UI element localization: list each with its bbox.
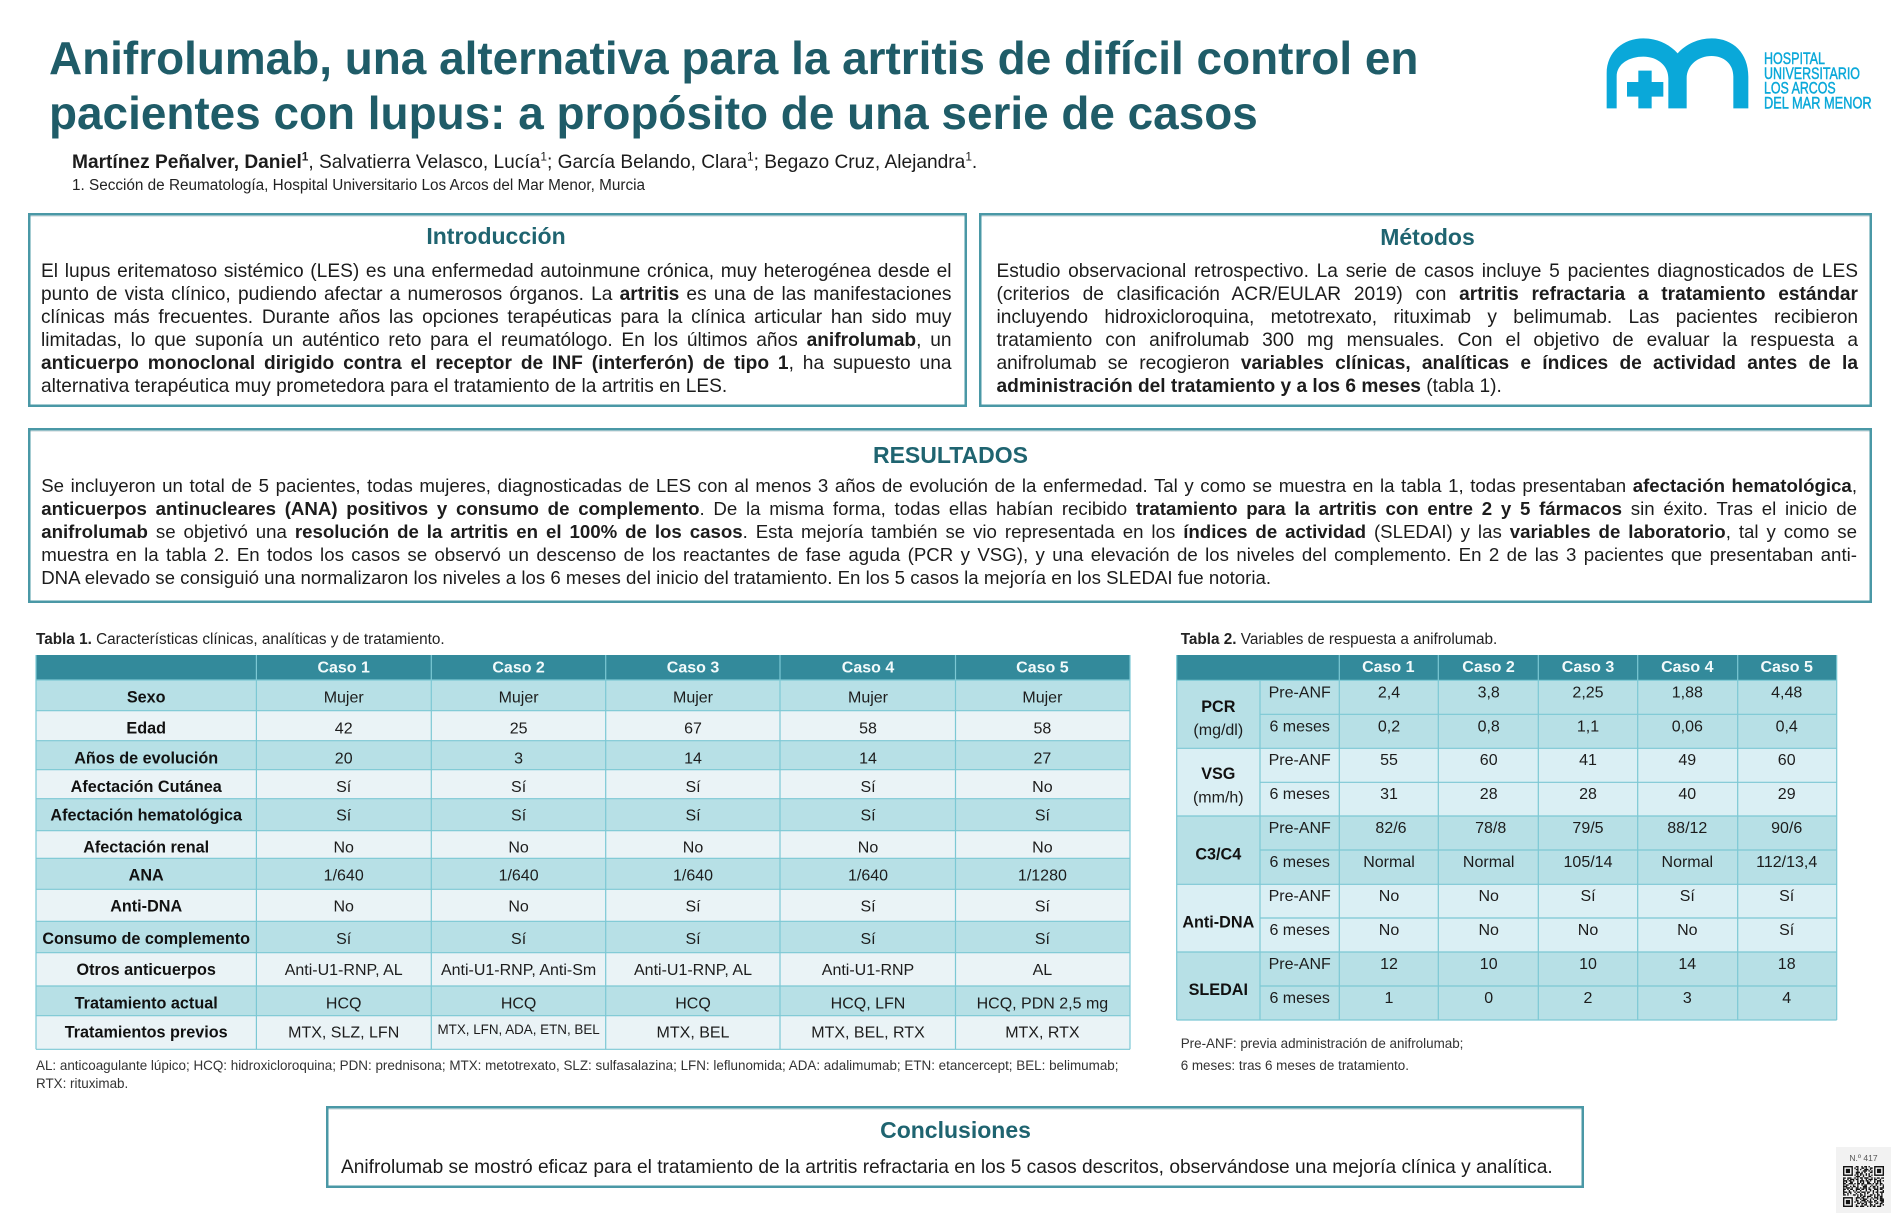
logo text: HOSPITAL [1764,49,1825,68]
row: años de evolución: 27 [1034,750,1051,767]
group: C3/C4: 90/6 [1771,820,1802,837]
group: Anti-DNA: No [1478,888,1499,905]
group: VSG: 60 [1778,752,1796,769]
text: introducción: punto de vista clínico, pudiendo afectar a numerosos órganos. La artritis es una de las manifestaciones [41,284,952,305]
row: ana: 1/640 [673,868,713,885]
group: Anti-DNA: Sí [1779,922,1795,939]
group: PCR: 0,8 [1478,718,1500,735]
group: SLEDAI: 1 [1385,990,1394,1007]
row: edad: 42 [335,720,353,737]
row: otros anticuerpos: Anti-U1-RNP, AL [634,962,752,979]
table 2 header: Caso 2 [1462,659,1515,676]
group: SLEDAI: 12 [1380,956,1398,973]
title: Anifrolumab, una alternativa para la artritis de difícil control en [49,32,1418,84]
group: SLEDAI: 14 [1678,956,1696,973]
group: PCR: 2,25 [1572,684,1604,701]
row: edad: Edad [126,719,166,737]
row: tratamiento actual: HCQ [501,995,536,1012]
row: consumo de complemento: Sí [1035,931,1051,948]
group: Anti-DNA [1182,888,1795,939]
panel: introducción [28,213,967,407]
row: afectación cutánea: Sí [685,779,701,796]
row: consumo de complemento: Sí [860,931,876,948]
row: consumo de complemento: Sí [511,931,527,948]
row: tratamiento actual: HCQ [326,995,361,1012]
row: afectación cutánea: Sí [511,779,527,796]
row: afectación hematológica: Sí [685,808,701,825]
row: sexo: Mujer [1022,689,1063,706]
table 2 [1176,655,1838,1021]
title [49,32,1418,139]
QR badge [1836,1147,1891,1213]
row: consumo de complemento: Sí [336,931,352,948]
caption: tabla 1: Tabla 1. Características clínicas, analíticas y de tratamiento. [36,631,445,648]
group: C3/C4: Normal [1662,854,1713,871]
row: ana: 1/1280 [1018,868,1067,885]
group: VSG: (mm/h) [1193,790,1244,806]
text: resultados: anifrolumab se objetivó una resolución de la artritis en el 100% de los casos. Esta mejoría también se vio representada en los índices de actividad (SLEDAI) y las variables de laboratorio, tal y como se [41,521,1857,542]
group: Anti-DNA: No [1578,922,1598,939]
icon: cross [1627,71,1663,108]
row: afectación cutánea: Sí [336,779,352,796]
table 2 header: Caso 4 [1661,659,1714,676]
row: consumo de complemento: Sí [685,931,701,948]
group: PCR [1193,684,1802,739]
row: edad: 58 [1034,720,1051,737]
panel: conclusiones [326,1106,1584,1188]
row: ana: 1/640 [499,868,539,885]
text: introducción: limitadas, lo que suponía un auténtico reto para el reumatólogo. En los últimos años anifrolumab, un [41,330,952,351]
group: Anti-DNA: No [1677,922,1698,939]
group: VSG: 55 [1380,752,1398,769]
row: otros anticuerpos: Anti-U1-RNP, AL [285,962,403,979]
row: afectación renal [83,839,1053,857]
group: Anti-DNA: Sí [1580,888,1596,905]
affiliation: 1. Sección de Reumatología, Hospital Universitario Los Arcos del Mar Menor, Murcia [72,177,645,194]
poster number: N.º 417 [1849,1153,1878,1163]
table 2 header: Caso 1 [1362,659,1415,676]
row: sexo: Mujer [848,689,889,706]
group: VSG: 31 [1380,786,1398,803]
group: C3/C4: Pre-ANF [1269,820,1331,837]
group: PCR: 0,4 [1776,718,1798,735]
group: C3/C4: 112/13,4 [1756,854,1817,871]
group: C3/C4: Normal [1463,854,1514,871]
row: tratamientos previos: MTX, LFN, ADA, ETN, BEL [437,1022,600,1037]
group: PCR: 1,1 [1577,718,1599,735]
footnote: tabla 1: AL: anticoagulante lúpico; HCQ: hidroxicloroquina; PDN: prednisona; MTX: metotrexato, SLZ: sulfasalazina; LFN: leflunomida; ADA: adalimumab; ETN: etancercept; BEL: belimumab; [36,1058,1118,1073]
row: ana [129,867,1067,885]
heading: introducción: Introducción [426,223,566,249]
group: PCR: 1,88 [1672,684,1703,701]
group: SLEDAI: 2 [1584,990,1593,1007]
row: edad [126,719,1051,737]
row: afectación hematológica: Sí [1035,808,1051,825]
text: resultados: anticuerpos antinucleares (ANA) positivos y consumo de complemento. De la misma forma, todas ellas habían recibido tratamiento para la artritis con entre 2 y 5 fármacos sin éxito. Tras el inicio de [41,498,1857,519]
text: introducción [41,261,952,397]
text: métodos: administración del tratamiento y a los 6 meses (tabla 1). [996,376,1502,397]
footnote: tabla 2 [1181,1036,1463,1073]
row: afectación renal: No [508,840,529,857]
logo: Hospital Universitario Los Arcos del Mar Menor [1606,38,1872,112]
row: anti-dna: Sí [685,899,701,916]
group: Anti-DNA: No [1379,888,1399,905]
group: Anti-DNA: No [1478,922,1499,939]
group: SLEDAI: 4 [1782,990,1791,1007]
row: afectación renal: Afectación renal [83,839,209,857]
row: ana: ANA [129,867,164,885]
group: VSG: 6 meses [1269,786,1330,803]
group: C3/C4 [1195,820,1817,871]
table 1 header: Caso 1 [317,659,370,676]
row: tratamiento actual: Tratamiento actual [75,994,218,1012]
group: C3/C4: 6 meses [1269,854,1330,871]
group: SLEDAI [1189,956,1796,1007]
row: otros anticuerpos: Anti-U1-RNP [822,962,914,979]
row: tratamientos previos: MTX, BEL [657,1025,730,1042]
row: tratamientos previos: MTX, BEL, RTX [811,1025,925,1042]
footnote: tabla 2: Pre-ANF: previa administración de anifrolumab; [1181,1036,1463,1051]
row: sexo: Mujer [499,689,539,706]
row: tratamientos previos [65,1022,1080,1042]
group: Anti-DNA: Sí [1779,888,1795,905]
row: afectación hematológica: Sí [860,808,876,825]
logo text: LOS ARCOS [1764,78,1836,97]
row: anti-dna: Anti-DNA [110,898,182,916]
row: otros anticuerpos: Anti-U1-RNP, Anti-Sm [441,962,596,979]
group: Anti-DNA: 6 meses [1269,922,1330,939]
row: afectación renal: No [1032,840,1053,857]
group: SLEDAI: SLEDAI [1189,981,1248,999]
row: afectación hematológica: Afectación hematológica [50,807,243,825]
table 1 header: Caso 2 [492,659,545,676]
group: Anti-DNA: Anti-DNA [1182,913,1255,931]
group: SLEDAI: 0 [1484,990,1493,1007]
caption: tabla 2: Tabla 2. Variables de respuesta a anifrolumab. [1181,631,1497,648]
row: años de evolución: 3 [514,750,523,767]
title: pacientes con lupus: a propósito de una serie de casos [49,87,1258,139]
row: anti-dna: Sí [1035,899,1051,916]
row: años de evolución: Años de evolución [74,749,218,767]
row: consumo de complemento [42,930,1051,948]
text: métodos: incluyendo hidroxicloroquina, metotrexato, rituximab y belimumab. Las pacientes recibieron [996,307,1858,328]
row: tratamiento actual: HCQ [675,995,711,1012]
panel: resultados [28,428,1872,603]
text: métodos: Estudio observacional retrospectivo. La serie de casos incluye 5 pacientes diagnosticados de LES [996,261,1858,282]
text: conclusiones: Anifrolumab se mostró eficaz para el tratamiento de la artritis refractaria en los 5 casos descritos, observándose una mejoría clínica y analítica. [341,1157,1553,1178]
text: resultados: DNA elevado se consiguió una normalizaron los niveles a los 6 meses del inicio del tratamiento. En los 5 casos la mejoría en los SLEDAI fue notoria. [41,567,1271,588]
row: anti-dna: No [508,899,529,916]
row: ana: 1/640 [848,868,888,885]
row: otros anticuerpos: Otros anticuerpos [76,961,216,979]
text: resultados [41,475,1857,588]
row: afectación cutánea: Sí [860,779,876,796]
footnote: tabla 2: 6 meses: tras 6 meses de tratamiento. [1181,1058,1409,1073]
logo text [1764,49,1872,112]
row: tratamiento actual: HCQ, LFN [831,995,905,1012]
group: PCR: 0,2 [1378,718,1400,735]
group: PCR: 4,48 [1771,684,1802,701]
row: otros anticuerpos: AL [1033,962,1052,979]
group: VSG [1193,752,1796,806]
row: años de evolución [74,749,1051,767]
group: PCR: 3,8 [1478,684,1500,701]
table 2 header: Caso 5 [1760,659,1813,676]
group: VSG: 28 [1480,786,1498,803]
text: resultados: muestra en la tabla 2. En todos los casos se observó un descenso de los reactantes de fase aguda (PCR y VSG), y una elevación de los niveles del complemento. En 2 de las 3 pacientes que presentaban anti- [41,544,1857,565]
row: afectación renal: No [858,840,878,857]
row: años de evolución: 14 [859,750,877,767]
group: C3/C4: C3/C4 [1195,845,1241,863]
row: tratamientos previos: MTX, SLZ, LFN [288,1025,399,1042]
group: Anti-DNA: Sí [1680,888,1695,905]
group: SLEDAI: 3 [1683,990,1692,1007]
row: edad: 58 [859,720,877,737]
text: introducción: alternativa terapéutica muy prometedora para el tratamiento de la artritis en LES. [41,376,727,397]
row: anti-dna [110,898,1051,916]
footnote: tabla 1 [36,1058,1118,1091]
group: VSG: Pre-ANF [1269,752,1331,769]
row: afectación renal: No [683,840,703,857]
group: SLEDAI: 10 [1480,956,1498,973]
group: PCR: 0,06 [1672,718,1703,735]
group: Anti-DNA: No [1379,922,1399,939]
text: introducción: clínicas más frecuentes. Durante años las opciones terapéuticas para la clínica articular han sido muy [41,307,952,328]
group: SLEDAI: 10 [1579,956,1597,973]
text: resultados: Se incluyeron un total de 5 pacientes, todas mujeres, diagnosticadas de LES con al menos 3 años de evolución de la enfermedad. Tal y como se muestra en la tabla 1, todas presentaban afectación hematológica, [41,475,1857,496]
group: VSG: VSG [1201,765,1235,783]
group: C3/C4: Normal [1363,854,1415,871]
group: C3/C4: 79/5 [1572,820,1604,837]
group: Anti-DNA: Pre-ANF [1269,888,1331,905]
panel: métodos [978,213,1872,407]
icon: arches [1607,38,1748,108]
footnote: tabla 1: RTX: rituximab. [36,1076,128,1091]
row: tratamientos previos: Tratamientos previos [65,1024,228,1042]
table 1 header: Caso 4 [842,659,894,676]
row: ana: 1/640 [324,868,364,885]
table 1 [35,655,1131,1050]
group: PCR: PCR [1201,698,1236,716]
text: métodos [996,261,1858,397]
table 1 backgrounds [36,655,1130,1049]
row: afectación hematológica: Sí [511,808,527,825]
group: C3/C4: 88/12 [1667,820,1707,837]
row: anti-dna: No [333,899,354,916]
row: afectación cutánea [71,778,1053,796]
text: métodos: tratamiento con anifrolumab 300 mg mensuales. Con el objetivo de evaluar la respuesta a [996,330,1858,351]
row: sexo: Mujer [673,689,714,706]
authors: Martínez Peñalver, Daniel1, Salvatierra Velasco, Lucía1; García Belando, Clara1; Begazo Cruz, Alejandra1. [72,150,977,173]
group: C3/C4: 105/14 [1564,854,1613,871]
group: PCR: 2,4 [1378,684,1400,701]
group: PCR: 6 meses [1269,718,1330,735]
text: introducción: anticuerpo monoclonal dirigido contra el receptor de INF (interferón) de tipo 1, ha supuesto una [41,353,952,374]
row: afectación renal: No [333,840,354,857]
row: años de evolución: 20 [335,750,353,767]
table 2 header [1362,659,1813,676]
row: afectación cutánea: No [1032,779,1053,796]
group: VSG: 29 [1778,786,1796,803]
heading: métodos: Métodos [1380,224,1475,250]
group: VSG: 60 [1480,752,1498,769]
group: VSG: 41 [1579,752,1597,769]
group: C3/C4: 82/6 [1375,820,1407,837]
row: afectación cutánea: Afectación Cutánea [71,778,223,796]
table 2 backgrounds [1177,655,1837,1020]
row: consumo de complemento: Consumo de complemento [42,930,250,948]
group: VSG: 49 [1678,752,1696,769]
text: métodos: anifrolumab se recogieron variables clínicas, analíticas e índices de actividad antes de la [996,353,1858,374]
heading: resultados: RESULTADOS [873,442,1028,468]
row: tratamientos previos: MTX, RTX [1005,1025,1080,1042]
row: tratamiento actual [75,994,1108,1012]
row: sexo: Sexo [127,688,166,706]
row: sexo [127,688,1063,706]
group: PCR: Pre-ANF [1269,684,1331,701]
table 1 header: Caso 5 [1016,659,1069,676]
row: otros anticuerpos [76,961,1052,979]
group: SLEDAI: 6 meses [1269,990,1330,1007]
text: introducción: El lupus eritematoso sistémico (LES) es una enfermedad autoinmune crónica, muy heterogénea desde el [41,261,952,282]
group: VSG: 28 [1579,786,1597,803]
table 2 header: Caso 3 [1562,659,1614,676]
group: SLEDAI: 18 [1778,956,1796,973]
group: PCR: (mg/dl) [1193,722,1243,739]
icon: QR code [1843,1166,1884,1207]
group: VSG: 40 [1678,786,1696,803]
table 1 header [317,659,1069,676]
heading: conclusiones: Conclusiones [880,1117,1031,1143]
row: edad: 25 [510,720,528,737]
row: edad: 67 [684,720,702,737]
table 1 header: Caso 3 [667,659,719,676]
row: afectación hematológica [50,807,1051,825]
row: anti-dna: Sí [860,899,876,916]
row: años de evolución: 14 [684,750,702,767]
row: sexo: Mujer [324,689,364,706]
row: tratamiento actual: HCQ, PDN 2,5 mg [977,995,1108,1012]
text: métodos: (criterios de clasificación ACR/EULAR 2019) con artritis refractaria a tratamiento estándar [996,284,1858,305]
group: SLEDAI: Pre-ANF [1269,956,1331,973]
row: afectación hematológica: Sí [336,808,352,825]
group: C3/C4: 78/8 [1475,820,1506,837]
